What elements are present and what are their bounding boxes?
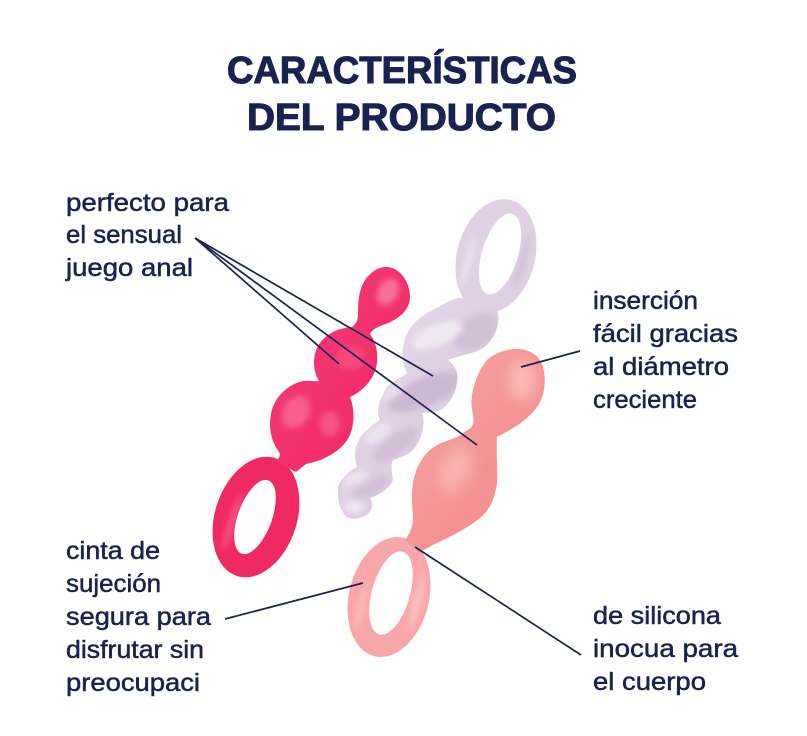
label: body-safe silicone: de silicona xyxy=(593,602,721,630)
lilac shading bands xyxy=(355,314,498,497)
lilac spiral body xyxy=(338,298,505,519)
product: salmon plug xyxy=(335,349,545,666)
salmon highlights xyxy=(431,360,536,498)
label: retrieval strap: disfrutar sin xyxy=(66,636,204,664)
label: body-safe silicone xyxy=(593,602,738,696)
label: body-safe silicone: inocua para xyxy=(593,635,738,663)
label: easy insertion: al diámetro xyxy=(593,353,729,381)
label: perfect for anal play: el sensual xyxy=(66,221,182,249)
line: body-safe silicone xyxy=(415,547,581,655)
label: perfect for anal play xyxy=(65,189,229,282)
label: retrieval strap: cinta de xyxy=(66,537,160,565)
label: body-safe silicone: el cuerpo xyxy=(593,668,706,696)
product: lilac spiral plug xyxy=(338,190,549,519)
lilac ring xyxy=(443,190,549,322)
lilac highlights xyxy=(341,315,466,513)
label: perfect for anal play: perfecto para xyxy=(66,189,229,217)
pink beaded body xyxy=(270,267,410,472)
infographic canvas xyxy=(65,48,738,696)
leader lines xyxy=(195,238,581,655)
label: retrieval strap: segura para xyxy=(66,603,211,631)
line: retrieval ring xyxy=(225,583,363,619)
label: easy insertion xyxy=(593,287,738,414)
line: anal play to salmon plug xyxy=(195,238,477,445)
pink ring xyxy=(198,445,314,589)
product: pink beaded plug xyxy=(212,266,410,578)
salmon body xyxy=(405,349,545,552)
label: easy insertion: inserción xyxy=(593,287,698,315)
pink highlights xyxy=(276,275,404,436)
title: DEL PRODUCTO xyxy=(247,97,556,139)
label: retrieval strap: preocupaci xyxy=(66,669,200,697)
label: retrieval strap: sujeción xyxy=(66,570,161,598)
label: easy insertion: creciente xyxy=(593,386,697,414)
line: anal play to pink plug xyxy=(195,238,339,364)
title xyxy=(227,48,577,139)
label: easy insertion: fácil gracias xyxy=(593,320,738,348)
title: CARACTERÍSTICAS xyxy=(227,48,577,92)
line: anal play to lilac plug xyxy=(195,238,433,376)
label: perfect for anal play: juego anal xyxy=(65,254,193,282)
salmon ring xyxy=(335,528,443,666)
line: easy insertion xyxy=(521,351,580,367)
label: retrieval strap xyxy=(66,537,211,697)
